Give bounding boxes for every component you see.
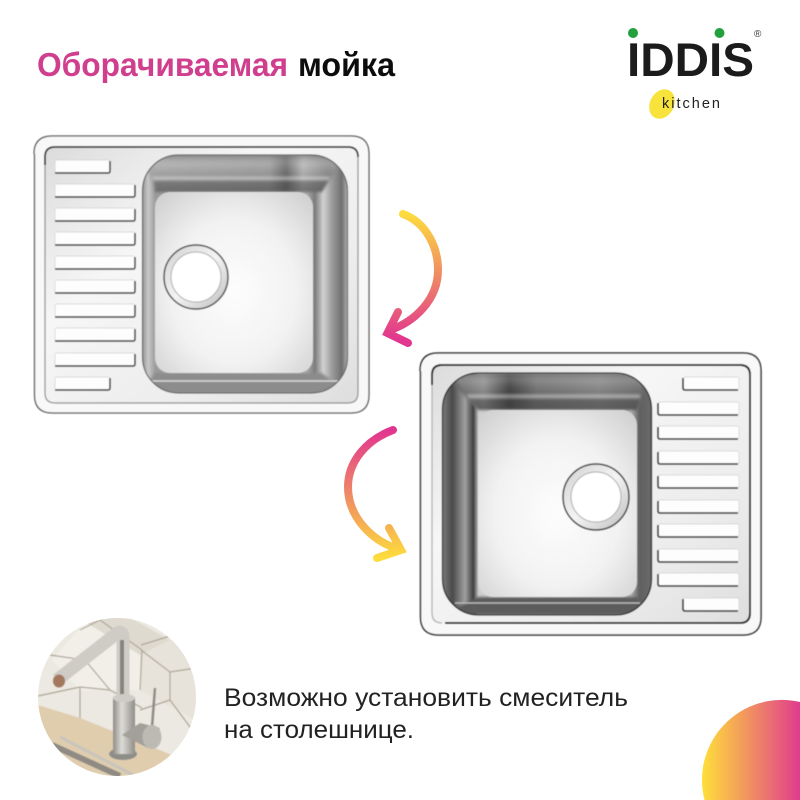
sink top: bowl on the right bbox=[34, 136, 370, 413]
title: мойка bbox=[298, 46, 396, 83]
arrow: curved down-right bbox=[348, 430, 401, 558]
logo: IDDIS kitchen bbox=[627, 28, 762, 123]
drainboard ribs bbox=[55, 160, 135, 390]
body text bbox=[224, 684, 628, 744]
drain bbox=[563, 464, 629, 530]
drain bbox=[164, 245, 228, 309]
body text: на столешнице. bbox=[224, 716, 414, 744]
faucet photo circle bbox=[38, 612, 196, 776]
faucet bbox=[109, 748, 137, 760]
logo: IDDIS kitchen: IDDIS bbox=[627, 33, 754, 86]
bowl bbox=[442, 373, 652, 615]
logo: IDDIS kitchen: ® bbox=[754, 29, 762, 40]
corner gradient circle bbox=[702, 700, 800, 800]
body text: Возможно установить смеситель bbox=[224, 684, 628, 712]
bowl bbox=[142, 155, 348, 393]
drainboard ribs bbox=[658, 377, 739, 611]
countertop bbox=[38, 704, 171, 776]
logo: IDDIS kitchen: kitchen bbox=[662, 96, 720, 112]
title: Оборачиваемая bbox=[37, 46, 288, 83]
arrow: curved down-left bbox=[388, 214, 438, 343]
sink edge bbox=[52, 745, 120, 776]
sink bottom: bowl on the left bbox=[420, 353, 762, 635]
